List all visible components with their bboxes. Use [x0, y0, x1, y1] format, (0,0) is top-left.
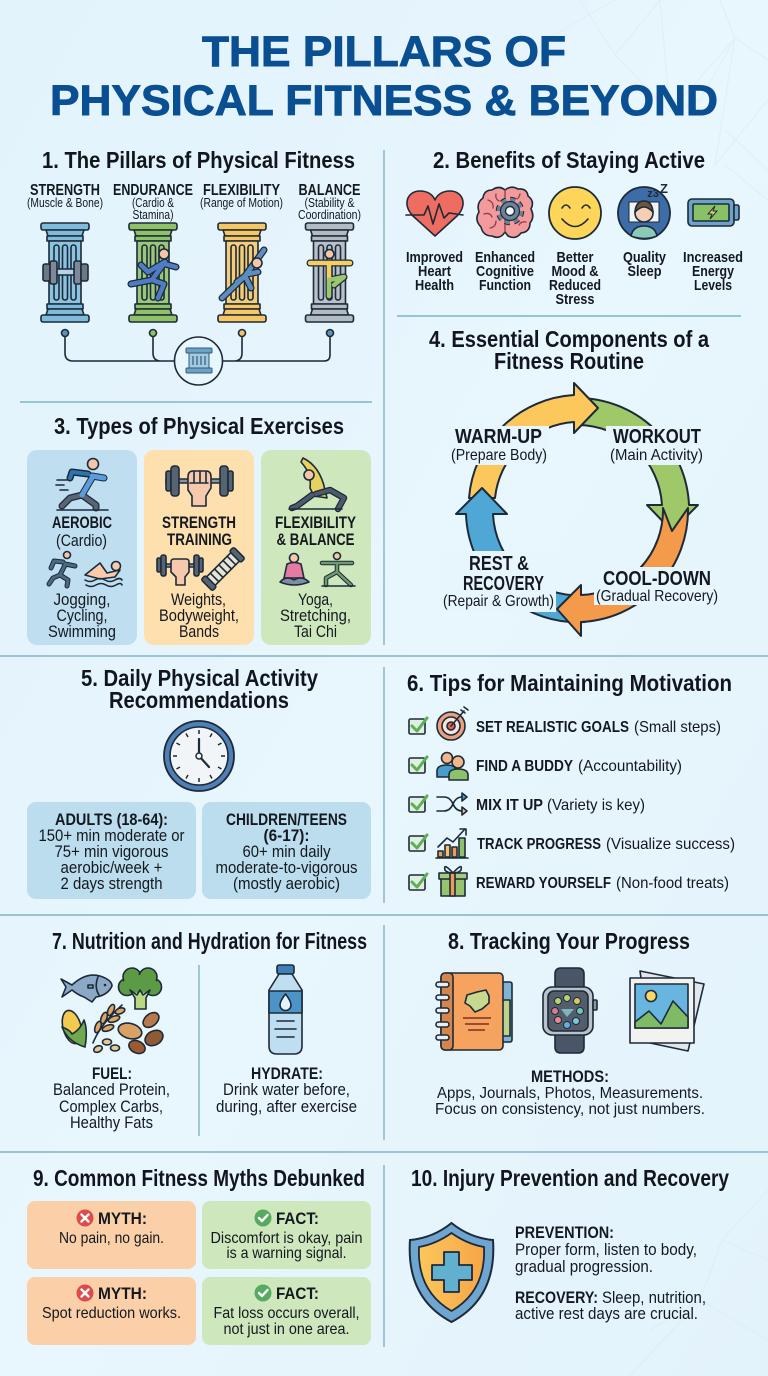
text: methods: Focus on consistency, not just numbers. [435, 1101, 705, 1118]
text: prevention and recovery: active rest days are crucial. [515, 1304, 698, 1323]
card: myth 2: MYTH: [98, 1284, 147, 1303]
tip: track progress [409, 829, 735, 858]
heading 4 [429, 326, 710, 374]
pillar labels: STRENGTH [30, 182, 100, 199]
panel: 9 common fitness myths debunked [27, 1165, 371, 1345]
card: strength training: Bodyweight, [159, 606, 239, 625]
heading 4: 4. Essential Components of a [429, 326, 710, 352]
card: children and teens: 60+ min daily [242, 842, 331, 861]
icon: foods [59, 968, 166, 1056]
card: myth 2 [27, 1277, 196, 1345]
card: fact 1: Discomfort is okay, pain [210, 1230, 362, 1247]
cycle labels: (Main Activity) [610, 447, 703, 464]
cycle labels: (Repair & Growth) [443, 593, 554, 610]
card: myth 1 [27, 1201, 196, 1269]
pillar labels [27, 182, 361, 222]
panel: 8 tracking your progress [435, 928, 705, 1118]
panel: 2 benefits of staying active [406, 147, 743, 308]
benefit labels: Cognitive [476, 263, 534, 280]
tip: set realistic goals: (Small steps) [634, 719, 721, 736]
panel: 10 injury prevention and recovery [410, 1165, 729, 1323]
heading 3: 3. Types of Physical Exercises [54, 413, 344, 439]
cycle labels: (Gradual Recovery) [596, 588, 718, 605]
benefit labels: Better [556, 249, 594, 266]
text: fuel [53, 1064, 170, 1132]
tip: set realistic goals [409, 707, 721, 740]
text: prevention and recovery [515, 1223, 706, 1323]
text: fuel: Healthy Fats [70, 1113, 153, 1132]
text: prevention and recovery: Proper form, listen to body, [515, 1240, 697, 1259]
pillar: endurance with runner [129, 223, 177, 322]
text: fuel: Balanced Protein, [53, 1080, 170, 1099]
tip: mix it up: MIX IT UP [476, 797, 543, 814]
card: children and teens: (mostly aerobic) [233, 874, 340, 893]
benefit labels: Stress [556, 291, 594, 308]
pillar: flexibility with figure [218, 223, 266, 322]
card: children and teens: (6-17): [264, 826, 310, 845]
pillar labels: (Range of Motion) [200, 195, 283, 210]
heading 5: 5. Daily Physical Activity [81, 665, 318, 691]
text: prevention and recovery: RECOVERY: [515, 1288, 598, 1307]
card: aerobic: Swimming [48, 622, 116, 641]
icon: battery [688, 199, 739, 226]
text: hydrate: Drink water before, [223, 1080, 350, 1099]
cycle arrows [441, 383, 720, 636]
cycle labels: RECOVERY [463, 573, 544, 595]
icon: smartwatch [543, 968, 597, 1053]
pillar labels: Coordination) [298, 207, 361, 222]
icon: dumbbell and band [157, 547, 245, 591]
pillar labels: FLEXIBILITY [203, 182, 280, 199]
cycle labels: REST & [469, 553, 529, 575]
benefit labels: Levels [694, 277, 732, 294]
cycle labels: (Prepare Body) [451, 447, 547, 464]
pillar labels: BALANCE [298, 182, 361, 199]
card: myth 2: Spot reduction works. [42, 1305, 181, 1322]
card: flexibility and balance [261, 450, 371, 645]
benefit labels: Mood & [552, 263, 599, 280]
text: prevention and recovery: Sleep, nutrition, [602, 1288, 706, 1307]
panel: 5 daily activity recommendations [27, 665, 371, 899]
tip: mix it up [409, 793, 645, 815]
icon: clock [164, 721, 234, 791]
card: fact 1 [202, 1201, 371, 1269]
card: aerobic [27, 450, 137, 645]
text: fuel: FUEL: [92, 1064, 132, 1083]
card: adults: 150+ min moderate or [38, 826, 185, 845]
icon: journal [436, 973, 512, 1050]
card: myth 1: No pain, no gain. [59, 1230, 164, 1247]
heading 1: 1. The Pillars of Physical Fitness [42, 147, 355, 173]
icon: quality sleep [618, 181, 670, 239]
tip: find a buddy: FIND A BUDDY [476, 758, 573, 775]
benefit labels: Energy [692, 263, 735, 280]
pillar labels: (Stability & [304, 195, 355, 210]
card: fact 1: FACT: [276, 1209, 319, 1228]
card: aerobic: Jogging, [54, 590, 110, 609]
benefit labels: Quality [623, 249, 667, 266]
cycle labels: COOL-DOWN [603, 568, 711, 590]
pillar labels: (Cardio & [132, 195, 174, 210]
cycle labels: WORKOUT [613, 426, 701, 448]
card: strength training [144, 450, 254, 645]
heading 7: 7. Nutrition and Hydration for Fitness [52, 928, 367, 954]
icon: runner [56, 458, 108, 510]
card: fact 2: FACT: [276, 1284, 319, 1303]
benefit labels: Heart [418, 263, 451, 280]
tip: reward yourself: REWARD YOURSELF [476, 875, 611, 892]
benefit labels: Function [479, 277, 531, 294]
heading 8: 8. Tracking Your Progress [448, 928, 690, 954]
heading 5 [81, 665, 318, 713]
card: adults: ADULTS (18-64): [55, 810, 168, 829]
card: children and teens [202, 802, 371, 899]
icon: shield [410, 1223, 493, 1322]
icon: fist with barbell [166, 466, 233, 506]
cycle labels: WARM-UP [455, 426, 542, 448]
benefit labels [406, 249, 743, 308]
pillar labels: Stamina) [132, 207, 174, 222]
card: children and teens: CHILDREN/TEENS [226, 810, 347, 829]
benefit labels: Enhanced [475, 249, 535, 266]
card: fact 2: not just in one area. [224, 1321, 350, 1338]
card: flexibility and balance: Tai Chi [294, 622, 337, 641]
card: adults: aerobic/week + [60, 858, 163, 877]
title: THE PILLARS OF [202, 28, 566, 76]
card: adults: 75+ min vigorous [54, 842, 168, 861]
text: hydrate: during, after exercise [216, 1097, 357, 1116]
tip: track progress: TRACK PROGRESS [477, 836, 601, 853]
benefit labels: Reduced [549, 277, 601, 294]
card: flexibility and balance: FLEXIBILITY [275, 513, 357, 532]
text: prevention and recovery: gradual progression. [515, 1257, 653, 1276]
card: flexibility and balance: & BALANCE [276, 530, 354, 549]
text: methods: METHODS: [531, 1067, 609, 1086]
card: aerobic: Cycling, [56, 606, 108, 625]
cycle labels [443, 426, 718, 610]
text: methods: Apps, Journals, Photos, Measurements. [437, 1085, 703, 1102]
tip: reward yourself [409, 867, 729, 896]
text: fuel: Complex Carbs, [59, 1097, 163, 1116]
card: adults: 2 days strength [60, 874, 162, 893]
panel: 6 tips for motivation [407, 670, 735, 896]
heading 5: Recommendations [109, 687, 289, 713]
title [50, 28, 718, 125]
icon: brain with gear [477, 187, 533, 237]
pillar connector with central icon [62, 330, 334, 385]
card: fact 1: is a warning signal. [226, 1245, 346, 1262]
panel: 3 types of physical exercises [27, 413, 371, 645]
icon: smiley [549, 187, 601, 239]
icon: photos [630, 971, 704, 1051]
panel: 4 essential components cycle [429, 326, 720, 636]
pillar labels: (Muscle & Bone) [27, 195, 103, 210]
heading 2: 2. Benefits of Staying Active [433, 147, 705, 173]
icon: meditation and warrior pose [280, 552, 355, 586]
card: strength training: Bands [179, 622, 219, 641]
decorative network lines [545, 0, 768, 1376]
heading 9: 9. Common Fitness Myths Debunked [33, 1165, 365, 1191]
card: strength training: Weights, [171, 590, 226, 609]
card: flexibility and balance: Yoga, [298, 590, 333, 609]
text: hydrate: HYDRATE: [251, 1064, 323, 1083]
text: hydrate [216, 1064, 357, 1116]
icon: water bottle [269, 965, 302, 1054]
tip: set realistic goals: SET REALISTIC GOALS [476, 719, 629, 736]
card: strength training: TRAINING [167, 530, 232, 549]
heading 4: Fitness Routine [494, 348, 644, 374]
benefit labels: Health [415, 277, 454, 294]
panel: 1 pillars of physical fitness [27, 147, 361, 385]
card: adults [27, 802, 196, 899]
icon: quality sleep: Z [660, 181, 668, 196]
card: aerobic: (Cardio) [56, 531, 107, 550]
card: fact 2: Fat loss occurs overall, [214, 1305, 360, 1322]
card: fact 2 [202, 1277, 371, 1345]
tip: find a buddy: (Accountability) [578, 758, 682, 775]
tip: reward yourself: (Non-food treats) [616, 875, 729, 892]
tip: mix it up: (Variety is key) [547, 797, 645, 814]
card: strength training: STRENGTH [162, 513, 236, 532]
text: prevention and recovery: PREVENTION: [515, 1223, 614, 1242]
pillar labels: ENDURANCE [113, 182, 193, 199]
text: methods [435, 1067, 705, 1118]
icon: heart [406, 191, 463, 236]
card: aerobic: AEROBIC [52, 513, 112, 532]
icon: side-lunge yoga [289, 458, 344, 509]
pillar: balance with figure [306, 223, 354, 322]
tip: track progress: (Visualize success) [606, 836, 735, 853]
benefit labels: Sleep [628, 263, 662, 280]
benefit labels: Increased [683, 249, 743, 266]
card: children and teens: moderate-to-vigorous [216, 858, 358, 877]
tip: find a buddy [409, 752, 682, 780]
card: flexibility and balance: Stretching, [280, 606, 351, 625]
icon: jogger and swimmer [49, 552, 122, 586]
panel: 7 nutrition and hydration [52, 928, 367, 1132]
benefit labels: Improved [406, 249, 463, 266]
card: myth 1: MYTH: [98, 1209, 147, 1228]
title: PHYSICAL FITNESS & BEYOND [50, 77, 718, 125]
pillar: strength with dumbbell [41, 223, 89, 322]
icon: quality sleep: z3 [647, 188, 659, 200]
